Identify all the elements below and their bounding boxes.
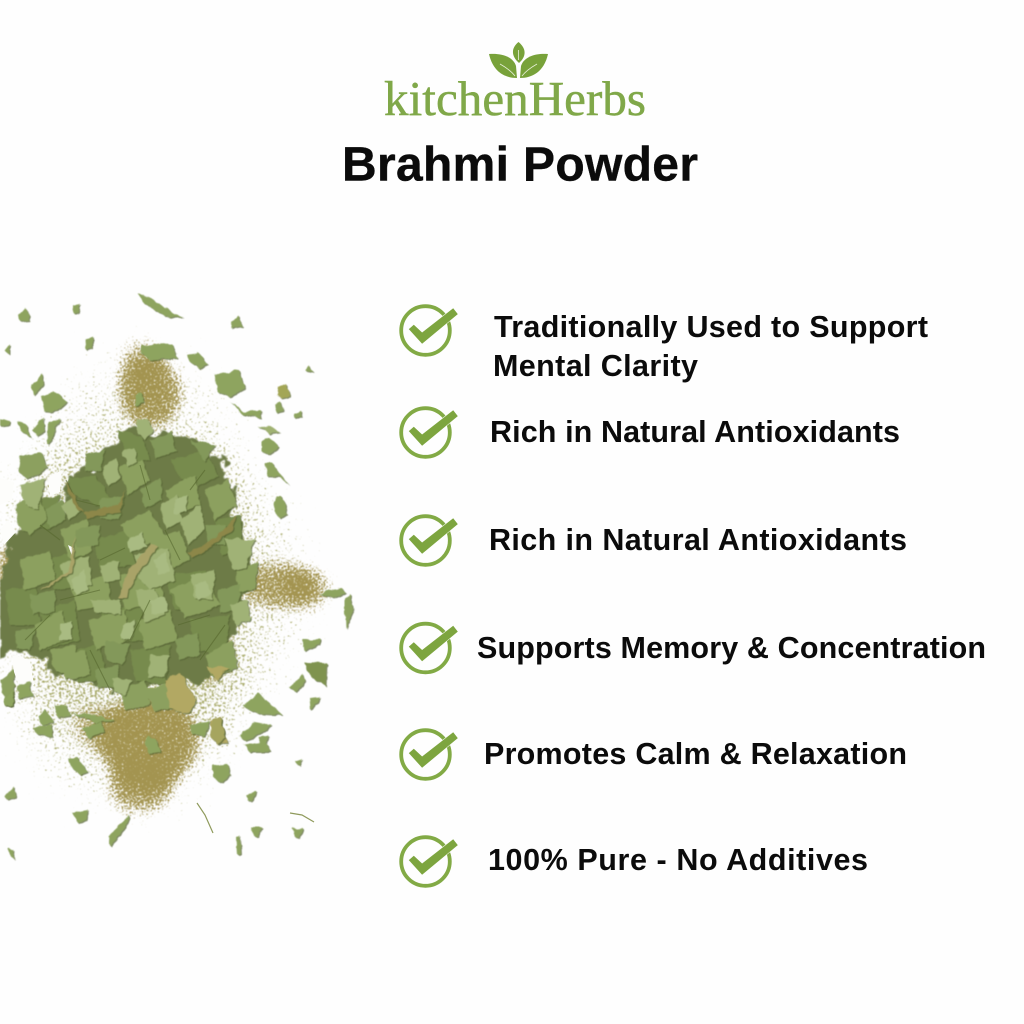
leaf layer: mid green [0, 432, 258, 712]
logo icon: three leaves [489, 42, 548, 78]
title: Brahmi Powder [342, 138, 698, 192]
benefit 6 [401, 837, 868, 886]
outer leaf fragments [0, 292, 353, 860]
benefit 4 [401, 624, 986, 672]
benefit 5 [401, 730, 907, 779]
leaf layer: light green [20, 418, 255, 695]
benefit 6 text: 100% Pure - No Additives [488, 843, 868, 877]
benefit 2 text: Rich in Natural Antioxidants [490, 415, 900, 449]
tan leaf strips [40, 480, 236, 745]
icon: check 5 [401, 730, 458, 779]
icon: check 2 [401, 408, 458, 457]
benefit 3 [401, 516, 907, 565]
benefit 1 text: Mental Clarity [493, 349, 698, 383]
gaps between left leaves [0, 470, 74, 688]
leaf layer: deep olive [5, 430, 244, 685]
thin stems [197, 803, 314, 833]
logo: kitchenHerbs [384, 42, 646, 126]
base of the leaf pile [0, 428, 250, 692]
icon: check 3 [401, 516, 458, 565]
benefit 1 text: Traditionally Used to Support [494, 310, 928, 344]
benefit 3 text: Rich in Natural Antioxidants [489, 523, 907, 557]
icon: check 1 [401, 306, 458, 355]
benefits list [401, 306, 986, 886]
benefit 2 [401, 408, 900, 457]
herb pile illustration [0, 292, 353, 860]
dark creases [25, 465, 225, 690]
benefit 1 [401, 306, 928, 383]
icon: check 4 [401, 624, 458, 672]
benefit 5 text: Promotes Calm & Relaxation [484, 737, 907, 771]
wide faint specks [0, 330, 335, 830]
logo wordmark: kitchenHerbs [384, 71, 646, 126]
icon: check 6 [401, 837, 458, 886]
benefit 4 text: Supports Memory & Concentration [477, 631, 986, 665]
fine powder patches [0, 332, 338, 820]
